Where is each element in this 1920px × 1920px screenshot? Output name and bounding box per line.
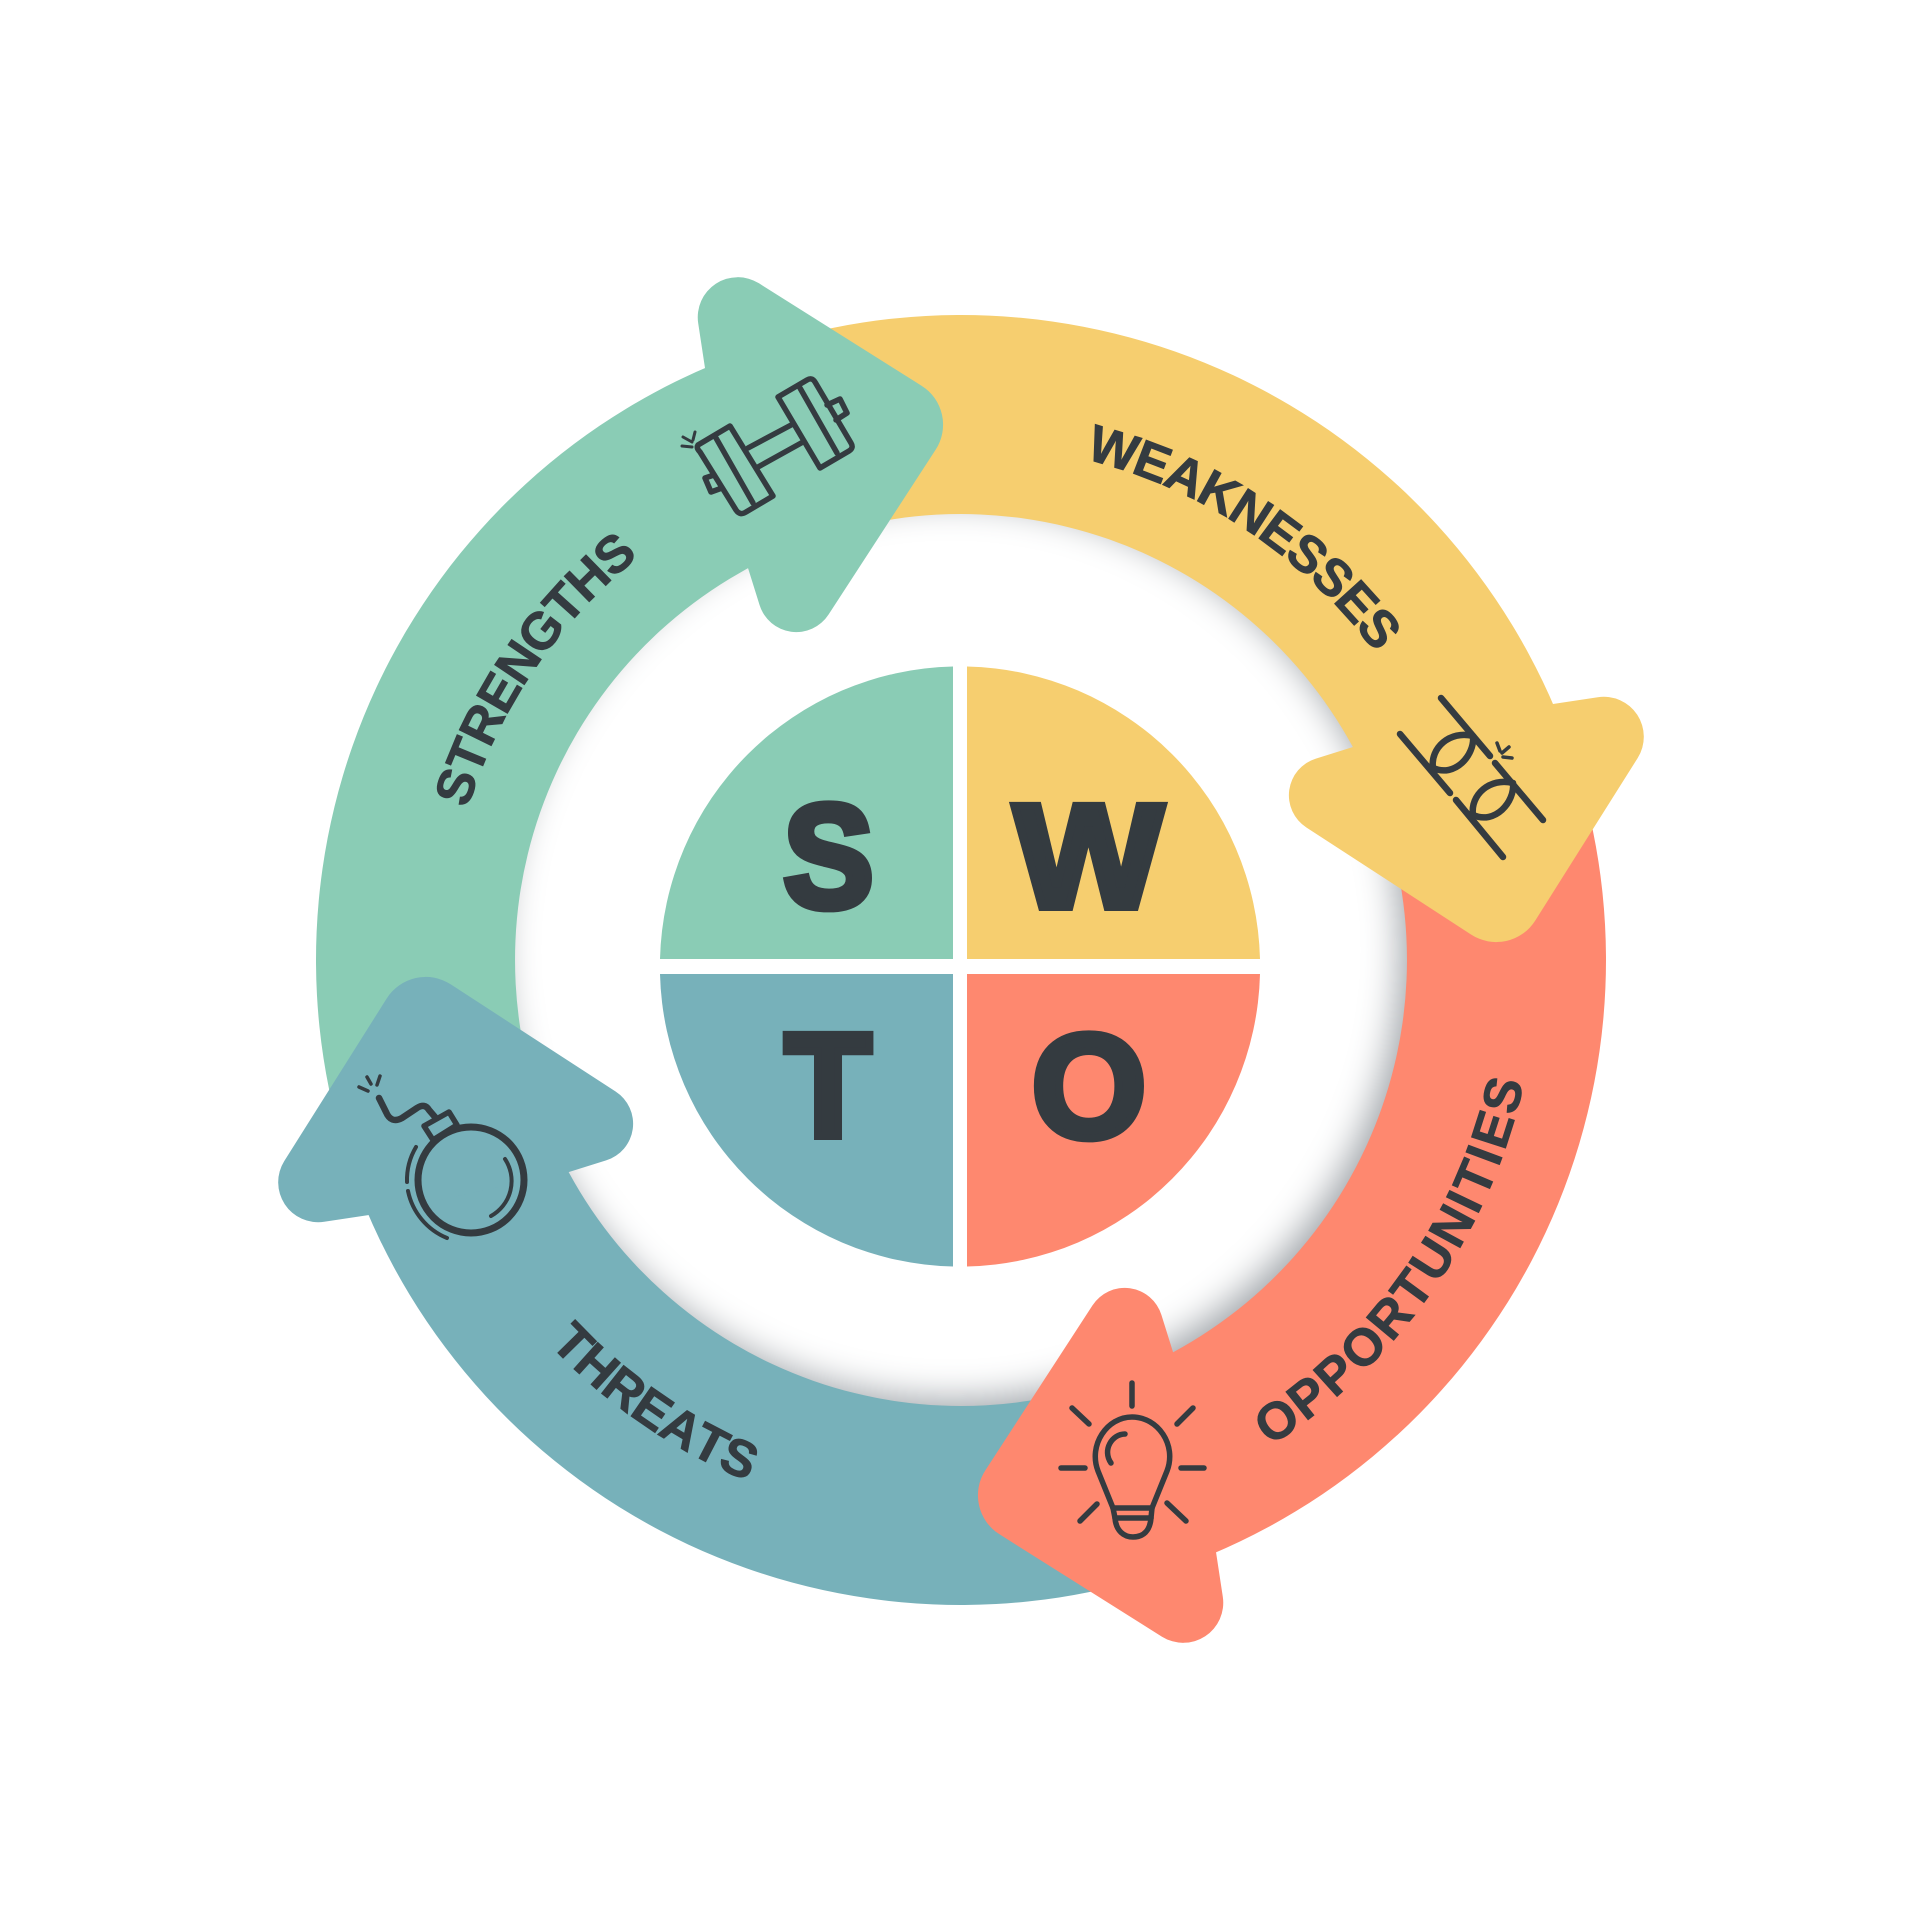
label: strengths: STRENGTHS bbox=[424, 521, 647, 813]
label: opportunities: OPPORTUNITIES bbox=[1244, 1071, 1536, 1456]
arrow band: strengths bbox=[316, 354, 808, 1181]
letter O: O bbox=[1032, 1005, 1146, 1169]
icon: dumbbell bbox=[682, 379, 852, 514]
arrow band: threats bbox=[355, 1112, 1182, 1605]
center pie: threats quadrant bbox=[660, 974, 953, 1266]
letter S: S bbox=[783, 774, 874, 938]
icon: light bulb bbox=[1061, 1383, 1204, 1537]
arrow band: opportunities bbox=[1114, 739, 1606, 1566]
arrow head: strengths bbox=[698, 277, 943, 632]
arrow head: threats bbox=[278, 977, 633, 1222]
center pie: weaknesses quadrant bbox=[967, 666, 1260, 959]
label: threats: THREATS bbox=[541, 1312, 767, 1492]
letter W: W bbox=[1014, 775, 1163, 939]
icon: bomb bbox=[359, 1076, 524, 1238]
arrow band: weaknesses bbox=[740, 315, 1567, 808]
center pie: strengths quadrant bbox=[660, 666, 953, 959]
arrow head: weaknesses bbox=[1289, 697, 1644, 942]
letter T: T bbox=[785, 1003, 871, 1168]
center pie: opportunities quadrant bbox=[967, 974, 1260, 1266]
label: weaknesses: WEAKNESSES bbox=[1082, 414, 1412, 661]
icon: broken chain bbox=[1400, 698, 1543, 857]
inner ring shadow bbox=[501, 500, 1408, 1407]
arrow head: opportunities bbox=[978, 1288, 1223, 1643]
